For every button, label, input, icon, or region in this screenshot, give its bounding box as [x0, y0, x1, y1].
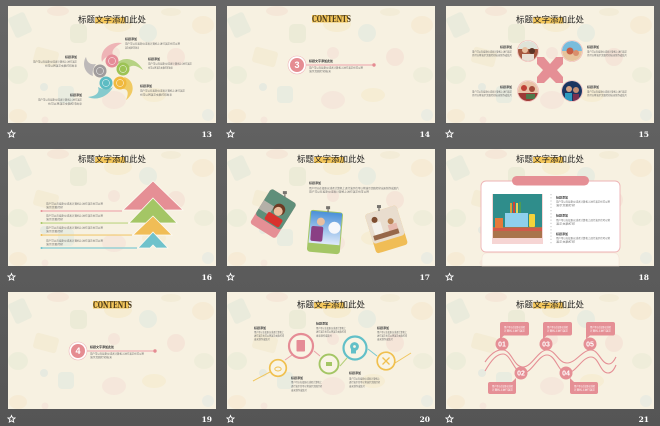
label lower left	[38, 92, 83, 106]
text 1	[46, 202, 104, 209]
section number badge: 4	[75, 346, 81, 356]
footer 13	[8, 130, 212, 139]
label B	[316, 320, 346, 338]
item 3	[556, 231, 610, 244]
triangle stack	[123, 181, 183, 248]
footer 20: 20	[420, 415, 430, 424]
label D: 进行演示也可以将演示文稿打印	[349, 380, 380, 384]
label right: 用户可以在投影仪或者计算机上进行演示	[148, 62, 192, 66]
item 3: 标题添加	[556, 231, 568, 236]
footer 21: 21	[639, 415, 649, 424]
yellow line	[40, 234, 132, 236]
callout 01: 计算机上进行演示	[504, 328, 526, 332]
item 2: 演示文稿打印	[556, 222, 576, 226]
label top right: 标题添加	[587, 44, 599, 49]
label E	[377, 325, 407, 341]
footer 21	[446, 415, 649, 424]
label bottom left: 用户可以在投影仪或者计算机上进行演示	[472, 90, 512, 94]
node 02	[514, 366, 528, 380]
text 2	[46, 214, 104, 221]
label E: 标题添加	[377, 325, 389, 330]
label bottom left: 标题添加	[500, 84, 512, 89]
label right: 也可以将演示文稿打印出来	[148, 66, 173, 70]
clip icon	[283, 191, 287, 197]
label lower right: 用户可以在投影仪或者计算机上进行演示	[140, 88, 185, 92]
callout 05: 计算机上进行演示	[590, 328, 612, 332]
photo top right	[562, 40, 582, 62]
node 01: 01	[498, 342, 506, 348]
label A	[254, 325, 284, 341]
slide 15: photos around cross	[445, 6, 654, 124]
lower wave	[485, 354, 616, 373]
label D: 标题添加	[349, 370, 361, 375]
section text: 用户可以在投影仪或者计算机上进行演示也可以将	[309, 66, 363, 70]
callout 04: 计算机上进行演示	[574, 388, 596, 392]
label bottom right	[587, 84, 627, 97]
white panel	[481, 181, 620, 252]
section text	[90, 344, 144, 359]
item 3: 演示文稿打印	[556, 240, 576, 244]
pink line	[40, 210, 122, 212]
label left: 也可以将演示文稿打印出来	[45, 64, 78, 68]
item 2: 用户可以在投影仪或者计算机上进行演示也可以将	[556, 218, 610, 222]
label left	[33, 54, 78, 68]
section text: 演示文稿打印出来	[309, 69, 332, 73]
slide 14 heading	[312, 15, 351, 25]
upper wave	[485, 350, 616, 367]
label right	[148, 56, 192, 70]
label bottom left: 也可以将演示文稿打印出来制作成胶片	[472, 93, 512, 97]
callout 01	[500, 322, 529, 339]
label bottom left	[472, 84, 512, 97]
card 2 green	[307, 204, 344, 254]
green line	[40, 222, 128, 224]
section text: 标题文字添加此处	[90, 344, 114, 349]
circle: cloud	[270, 360, 286, 376]
label left: 标题添加	[65, 54, 77, 59]
label D: 用户可以在投影仪或者计算机上	[349, 376, 380, 380]
node 04	[560, 366, 572, 380]
photo bottom right	[562, 80, 582, 102]
slide 21: wave timeline	[445, 292, 654, 410]
label B: 标题添加	[316, 320, 328, 326]
section line	[306, 63, 376, 67]
item 2	[556, 212, 610, 226]
slide 19: contents	[7, 292, 216, 410]
slide 18 title: 标题文字添加此处	[516, 154, 585, 164]
slide 17: clipped photo cards	[226, 149, 435, 266]
section text	[309, 58, 363, 73]
slide 19 heading	[93, 301, 132, 311]
label left: 用户可以在投影仪或者计算机上进行演示	[33, 60, 77, 64]
footer 13: 13	[202, 130, 212, 139]
footer 17: 17	[420, 273, 430, 282]
callout 03: 计算机上进行演示	[547, 328, 569, 332]
text 4	[46, 238, 104, 246]
label top right: 用户可以在投影仪或者计算机上进行演示也可以将	[125, 42, 180, 46]
footer 19: 19	[202, 415, 212, 424]
label lower right	[140, 83, 185, 96]
card 3 yellow	[363, 200, 408, 254]
slide 14: contents	[226, 6, 435, 124]
label top left: 用户可以在投影仪或者计算机上进行演示	[472, 50, 512, 54]
item 1: 标题添加	[556, 194, 568, 200]
item 1	[556, 194, 610, 207]
slide 16 title: 标题文字添加此处	[78, 154, 147, 164]
label bottom right: 标题添加	[587, 84, 599, 89]
text 3: 演示文稿打印	[46, 229, 64, 233]
callout 02	[488, 378, 516, 394]
footer 15	[446, 130, 649, 139]
callout 04	[570, 378, 598, 394]
photo top left	[518, 40, 538, 62]
footer 20	[227, 415, 430, 424]
footer 18: 18	[639, 273, 649, 282]
node 03	[540, 338, 552, 350]
item 2: 标题添加	[556, 212, 568, 218]
label top left	[472, 44, 512, 57]
text 2: 用户可以在投影仪或者计算机上进行演示也可以将	[46, 214, 104, 218]
slide 14 heading: CONTENTS	[312, 15, 351, 25]
text 4: 用户可以在投影仪或者计算机上进行演示也可以将	[46, 238, 104, 242]
clip icon	[377, 205, 381, 211]
footer 14	[227, 130, 430, 139]
label C: 进行演示也可以将演示文稿打印	[291, 384, 322, 388]
section text: 演示文稿打印出来	[90, 355, 113, 359]
slide 16: layered triangles	[7, 149, 216, 266]
intro text	[309, 180, 400, 194]
label bottom right: 也可以将演示文稿打印出来制作成胶片	[587, 93, 627, 97]
label lower right: 标题添加	[140, 83, 152, 88]
label bottom right: 用户可以在投影仪或者计算机上进行演示	[587, 90, 627, 94]
footer 17	[227, 273, 430, 282]
label E: 出来制作成胶片	[377, 337, 393, 341]
intro text: 用户可以在投影仪或者计算机上进行演示也可以将演示文稿打印出来制作成胶片	[309, 186, 400, 190]
footer 19	[8, 415, 212, 424]
slide 17 title: 标题文字添加此处	[297, 154, 366, 164]
label lower left: 标题添加	[70, 92, 82, 97]
label top right: 标题添加	[125, 36, 137, 41]
callout 04: 用户可以在投影仪或者	[574, 384, 595, 388]
photo bottom left	[518, 80, 538, 102]
label top right	[587, 44, 627, 57]
node 05: 05	[586, 342, 594, 348]
label E: 进行演示也可以将演示文稿打印	[377, 334, 407, 338]
slide 20 title: 标题文字添加此处	[297, 300, 366, 310]
label A: 用户可以在投影仪或者计算机上	[254, 330, 284, 334]
label A: 标题添加	[254, 325, 266, 330]
label lower right: 也可以将演示文稿打印出来	[140, 92, 173, 96]
teal line	[40, 247, 137, 249]
label D: 出来制作成胶片	[349, 384, 365, 388]
connector lines	[253, 349, 411, 381]
node 04: 04	[562, 370, 570, 378]
label top right: 用户可以在投影仪或者计算机上进行演示	[587, 50, 627, 54]
section text: 用户可以在投影仪或者计算机上进行演示也可以将	[90, 352, 144, 356]
node 02: 02	[517, 370, 525, 378]
label top right: 也可以将演示文稿打印出来制作成胶片	[587, 53, 627, 57]
section text: 标题文字添加此处	[309, 58, 333, 63]
label B: 用户可以在投影仪或者计算机上	[316, 326, 346, 330]
circle: envelope	[320, 354, 338, 374]
slide 19 heading: CONTENTS	[93, 301, 132, 311]
node 01	[496, 338, 508, 350]
footer 18	[446, 273, 649, 282]
label A: 出来制作成胶片	[254, 337, 270, 341]
item 3: 用户可以在投影仪或者计算机上进行演示也可以将	[556, 236, 610, 240]
clip icon	[326, 206, 330, 212]
slide 20: circle timeline	[226, 292, 435, 410]
item 1: 用户可以在投影仪或者计算机上进行演示也可以将	[556, 200, 610, 204]
label D	[349, 370, 380, 388]
label top right	[125, 36, 180, 50]
label C	[291, 375, 322, 392]
panel reflection	[482, 253, 619, 266]
dashed divider	[550, 194, 552, 244]
pink cross	[537, 57, 563, 83]
node 05	[584, 338, 596, 350]
text 3	[46, 226, 104, 233]
label top right: 演示文稿打印出来	[125, 46, 139, 50]
section number badge	[288, 56, 306, 74]
label C: 标题添加	[291, 375, 303, 380]
callout 01: 用户可以在投影仪或者	[504, 325, 525, 329]
footer 15: 15	[639, 130, 649, 139]
footer 16	[8, 273, 212, 282]
section number badge: 3	[294, 60, 300, 70]
label right: 标题添加	[148, 56, 160, 61]
callout 02: 用户可以在投影仪或者	[492, 384, 513, 388]
section number badge	[69, 342, 87, 360]
text 1: 演示文稿打印	[46, 205, 64, 209]
circle: head	[344, 336, 366, 360]
callout 03: 用户可以在投影仪或者	[547, 325, 568, 329]
label B: 进行演示也可以将演示文稿打印	[316, 330, 346, 334]
callout 03	[543, 322, 572, 339]
slide 13: pinwheel	[7, 6, 216, 124]
label E: 用户可以在投影仪或者计算机上	[377, 330, 407, 334]
callout 02: 计算机上进行演示	[492, 388, 514, 392]
slide 13 title: 标题文字添加此处	[78, 14, 147, 24]
classroom photo	[492, 194, 543, 244]
footer 16: 16	[202, 273, 212, 282]
label top left: 标题添加	[500, 44, 512, 49]
section line	[87, 349, 157, 353]
label top left: 也可以将演示文稿打印出来制作成胶片	[472, 53, 512, 57]
text 2: 演示文稿打印	[46, 217, 64, 221]
intro text: 用户可以在投影仪或者计算机上进行演示也可以将	[309, 190, 370, 194]
slide 21 title: 标题文字添加此处	[516, 300, 585, 310]
circle: book	[289, 334, 313, 358]
text 3: 用户可以在投影仪或者计算机上进行演示也可以将	[46, 226, 104, 230]
slide 18: white panel with photo	[445, 149, 654, 266]
footer 14: 14	[420, 130, 430, 139]
card 1 pink	[250, 183, 300, 239]
pinwheel diagram	[84, 43, 143, 100]
text 1: 用户可以在投影仪或者计算机上进行演示也可以将	[46, 202, 104, 206]
callout 05: 用户可以在投影仪或者	[590, 325, 611, 329]
slide 15 title: 标题文字添加此处	[516, 14, 585, 24]
label A: 进行演示也可以将演示文稿打印	[254, 334, 284, 338]
intro text: 标题添加	[309, 180, 321, 185]
label C: 用户可以在投影仪或者计算机上	[291, 380, 322, 384]
pink pill	[512, 176, 589, 186]
callout 05	[586, 322, 615, 339]
label lower left: 也可以将演示文稿打印出来	[48, 102, 83, 106]
label C: 出来制作成胶片	[291, 388, 307, 392]
text 4: 演示文稿打印	[46, 242, 64, 246]
circle: cross	[377, 352, 395, 370]
node 03: 03	[542, 342, 550, 348]
label lower left: 用户可以在投影仪或者计算机上进行演示	[38, 98, 82, 102]
label B: 出来制作成胶片	[316, 334, 332, 338]
item 1: 演示文稿打印	[556, 203, 576, 207]
